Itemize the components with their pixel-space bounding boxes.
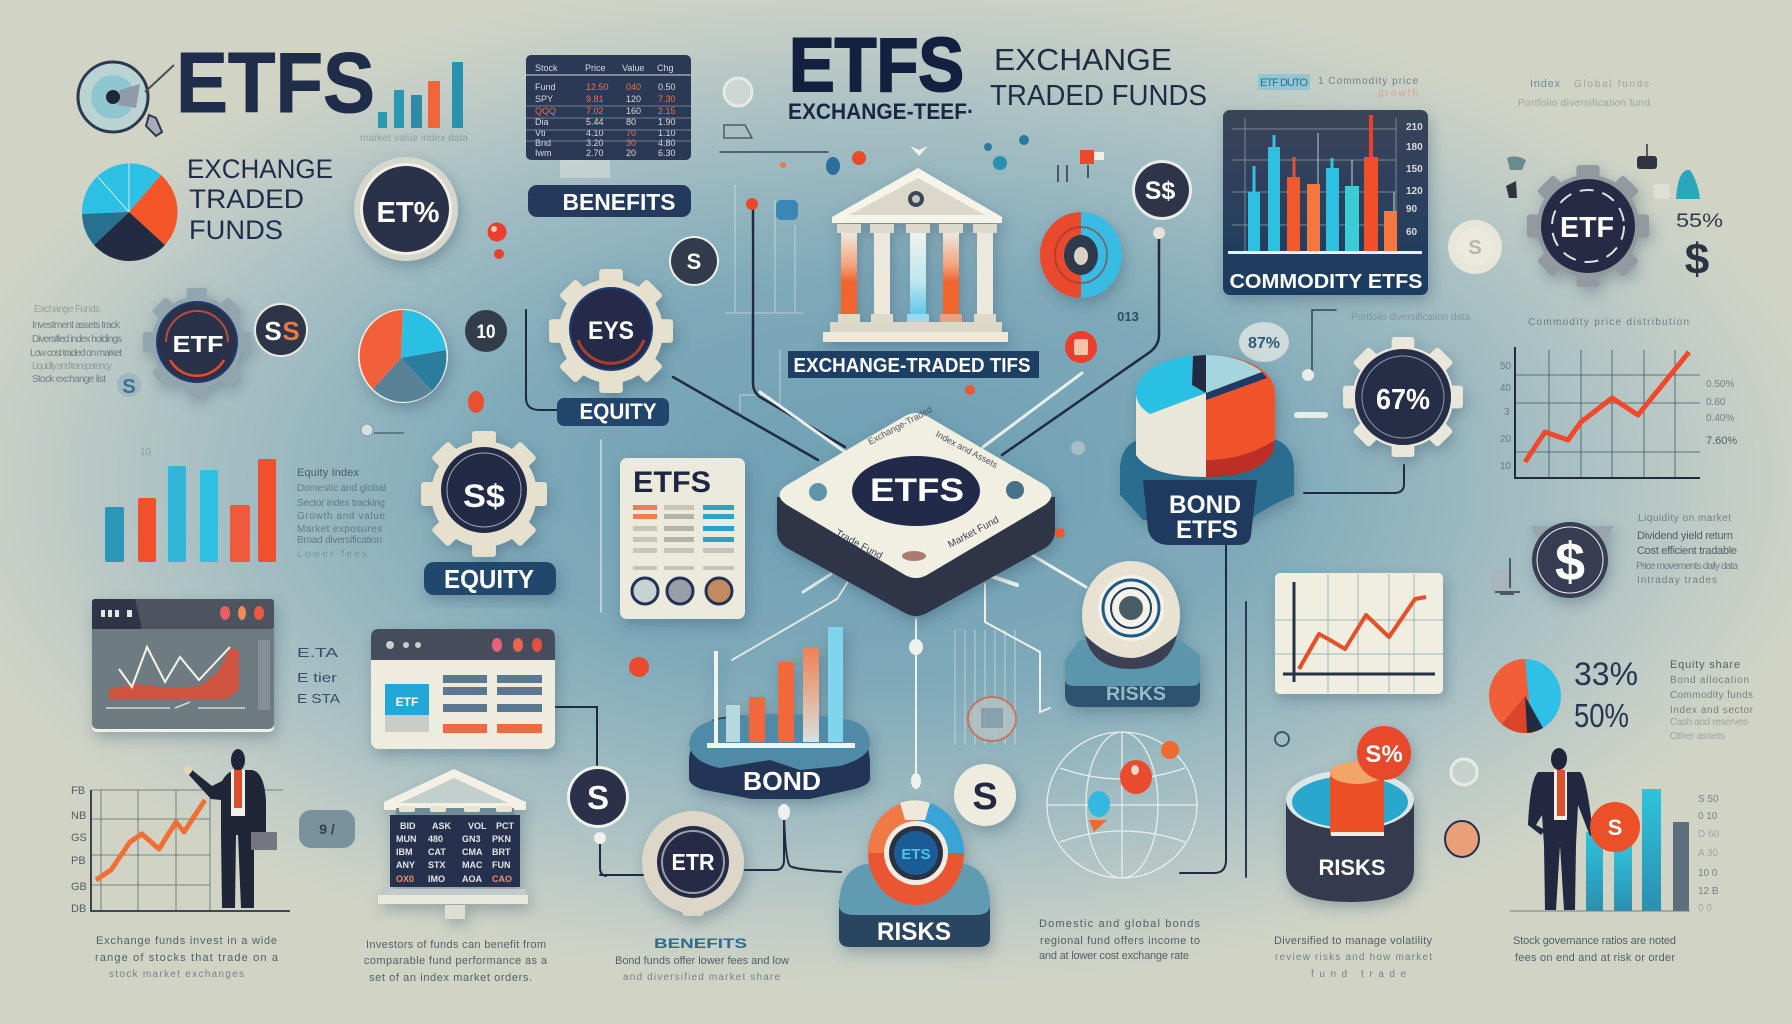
text block: benefits bottom: Bond funds offer lower fees and low [615,955,789,967]
text block: bar chart note: Sector index tracking [297,498,385,509]
heading: exchange traded funds left [187,154,333,245]
text block: pie note [1670,659,1754,742]
small dot and hex [965,309,1139,395]
icon: bank with data board: CMA [462,847,483,857]
platform: risks center: ETS [901,846,931,863]
badge: S$: S [264,316,282,346]
faint labels: top right: Global funds [1574,79,1649,90]
monitor: stock table: 4.10 [586,128,604,138]
monitor: stock table: 20 [626,148,636,158]
chart panel: commodity ETFs: 150 [1406,164,1423,175]
monitor: stock table: 2.70 [586,148,604,158]
text block: globe note: and at lower cost exchange rate [1039,950,1189,962]
labels: right bars: A 30 [1698,848,1718,859]
small icons: top center [724,78,1104,220]
badge: S top [1132,160,1192,239]
figure: businessman left [184,749,277,908]
figure: businessman right [1528,748,1596,910]
faint labels: top right [1258,74,1650,109]
monitor: stock table: Chg [657,63,674,73]
monitor: stock table: 5.44 [586,117,604,127]
monitor: stock table: Vti [535,128,546,138]
stats: percentages: 33% [1574,656,1638,692]
pie 3D: bond ETFs [1120,355,1294,520]
chart panel: commodity ETFs: COMMODITY ETFS [1230,271,1422,293]
badge: S top: S$ [1145,177,1175,205]
heading: exchange traded funds main: TRADED FUNDS [990,80,1207,112]
pins: red [488,222,506,259]
globe pins [1088,741,1179,832]
text block: left description [30,304,122,385]
line chart: top right: 0.60 [1706,397,1726,408]
icon: bank with data board: PKN [492,834,511,844]
text block: bottom 1: range of stocks that trade on a [95,952,279,964]
heading: exchange traded funds left: TRADED [189,184,304,214]
central hub: ETFS platform: Trade Fund [834,528,884,562]
monitor: stock table: 1.10 [658,128,676,138]
stat: 55%: 55% [1676,211,1723,232]
small icon: beside dollar [1491,558,1520,594]
text block: bar chart note: Market exposures [297,524,382,535]
window: dashboard: ETF [396,695,418,709]
monitor: stock table: 7.30 [658,94,676,104]
label: equity small [557,398,669,426]
pin: orange [468,391,484,413]
bar chart: top left [360,62,468,144]
heading: exchange traded funds main: EXCHANGE [994,42,1172,77]
gear: S$ equity: S$ [463,478,505,514]
ring icon: orange [968,697,1016,741]
ball: risks right: RISKS [1106,684,1166,705]
platform: bond [689,627,870,799]
label: bond ETFs: BOND [1169,491,1241,519]
text block: pie note: Index and sector [1670,705,1754,716]
gear: 67%: 67% [1376,384,1430,416]
platform: risks center [839,800,990,947]
text block: globe note [1039,918,1200,962]
icon: bank with data board: MAC [462,860,483,870]
monitor: stock table [526,55,691,178]
icon: bank with data board: CAO [492,874,512,884]
chart card: cream line chart [1275,573,1443,694]
monitor: stock table: 1.90 [658,117,676,127]
badge: ETF with ring left: ETF [172,331,224,357]
connector lines [526,152,1404,877]
ball: risks right [1065,561,1200,707]
chart: businessman left: DB [71,903,86,915]
text block: bottom 2: comparable fund performance as a [364,955,548,967]
label: equity small: EQUITY [580,399,657,424]
badge: small dark S [669,236,719,286]
badge: 10 [465,310,507,352]
text block: bar chart note: Equity Index [297,467,360,479]
bubble: 87%: 87% [1248,335,1280,352]
gear: EYS: EYS [588,317,634,345]
badge: S$: S [282,316,300,346]
monitor: stock table: 040 [626,82,641,92]
badge: ETF with ring left [143,288,251,396]
label: bond ETFs [1143,480,1257,545]
platform: bond: BOND [743,766,821,796]
text block: bar chart note [297,467,386,560]
ghost charts: faint background lines [726,185,1015,745]
text block: bottom right 1: review risks and how market [1275,952,1432,963]
monitor: stock table: 12.50 [586,82,609,92]
badge: S circle bottom [567,766,629,844]
text block: dollar note: Cost efficient tradable [1637,545,1737,557]
line chart: top right: 10 [1500,461,1512,472]
text block: bottom 2: set of an index market orders. [369,972,532,984]
coin: orange S: S [1608,815,1622,840]
icon: bank with data board: 480 [428,834,443,844]
faint labels: top right: 1 Commodity price [1318,76,1418,87]
text: window notes: E STA [297,691,340,706]
text block: bottom right 2: fees on end and at risk or order [1515,952,1675,964]
text block: pie note: Equity share [1670,659,1740,671]
icon: bank with data board: IMO [428,874,445,884]
chart: businessman left: PB [71,855,86,867]
icon: bank with data board: BRT [492,847,511,857]
heading: exchange traded funds left: FUNDS [189,215,283,245]
monitor: stock table: 120 [626,94,641,104]
dish: split red and cyan [1040,212,1122,298]
text block: left description: Liquidity and transparency [32,361,112,372]
subheading: exchange-teef: EXCHANGE-TEEF· [788,99,974,124]
text block: globe note: regional fund offers income to [1040,935,1200,947]
small items: bond right: Portfolio diversification data [1351,312,1470,323]
document: ETFS [620,458,745,619]
monitor: stock table: QQQ [535,106,556,116]
icon: dollar dark: $ [1685,235,1709,284]
bar chart: top left: market value index data [360,133,468,144]
chart: businessman left: NB [71,810,86,822]
heading: ETFS left: ETFS [176,36,375,131]
chart: businessman left [71,785,290,915]
monitor: stock table: 3.20 [586,138,604,148]
label: equity [424,562,556,595]
stats: percentages: 50% [1574,697,1629,734]
label: equity: EQUITY [444,564,534,594]
monitor: stock table: Fund [535,82,556,92]
text block: dollar note: Intraday trades [1637,575,1717,586]
monitor: stock table: Dia [535,117,549,127]
line chart: top right: 3 [1504,407,1510,418]
heading: exchange traded funds main [990,42,1207,112]
text block: bar chart note: Domestic and global [297,483,386,494]
icon: bank with data board: CAT [428,847,446,857]
faint labels: top right: Index [1530,78,1560,90]
text block: bar chart note: Broad diversification [297,535,382,546]
text block: pie note: Other assets [1670,731,1725,742]
text block: left description: Exchange Funds [34,304,100,315]
central hub: ETFS platform: Market Fund [946,515,1001,551]
central hub: ETFS platform: Exchange-Traded [866,405,934,447]
stats: percentages [1574,656,1638,734]
icon: bank with data board: ASK [432,821,452,831]
cylinder: risks [1286,726,1414,902]
coin: S cream: S [1468,237,1482,259]
chart panel: commodity ETFs: 90 [1406,204,1418,215]
text block: left description: Stock exchange list [32,374,106,385]
pin: red large [1120,760,1152,794]
text block: dollar note: Dividend yield return [1637,530,1733,542]
bubble: grey: 9 / [319,821,335,837]
labels: right bars: 12 B [1698,886,1719,897]
monitor: stock table: Bnd [535,138,551,148]
faint labels: top right: growth [1378,88,1418,99]
badge: ET% [354,157,458,261]
text block: benefits bottom: BENEFITS [654,935,747,951]
coin: dollar [1530,522,1614,598]
line chart: top right [1500,317,1737,478]
label: benefits [528,185,691,217]
label: benefits: BENEFITS [562,189,676,215]
monitor: stock table: 6.30 [658,148,676,158]
bubble: 87% [1239,322,1289,362]
icon: bank with data board: GN3 [462,834,481,844]
icon: bank with data board: PCT [496,821,515,831]
monitor: stock table: 30 [626,138,636,148]
text block: globe note: Domestic and global bonds [1039,918,1200,930]
icon: bank with data board: OX0 [396,874,414,884]
chart panel: commodity ETFs: 210 [1406,122,1423,133]
small icons: around gear [1506,144,1700,199]
text: window notes: E tier [297,670,338,685]
monitor: stock table: Price [585,63,606,73]
text block: bottom right 1 [1274,935,1432,980]
line chart: top right: 40 [1500,383,1512,394]
badge: ET%: ET% [376,197,440,229]
text block: bottom right 1: Diversified to manage volatility [1274,935,1432,947]
badge: small dark S: S [687,249,701,274]
badge: S circle bottom: S [587,779,609,816]
line chart: top right: 0.50% [1706,379,1734,390]
text block: pie note: Bond allocation [1670,675,1749,686]
text block: bottom right 2: Stock governance ratios are noted [1513,935,1676,947]
labels: right bars [1698,794,1720,914]
chart: businessman left: GS [71,832,87,844]
chart panel: commodity ETFs [1223,110,1428,295]
icon: bank with data board: IBM [396,847,412,857]
chart panel: commodity ETFs: 120 [1406,186,1423,197]
small dot: red [629,657,649,677]
line chart: top right: 0.40% [1706,413,1734,424]
gear: ETF top right: ETF [1560,212,1614,244]
text block: bottom 1: Exchange funds invest in a wide [96,935,277,947]
window: dark chart [92,599,274,732]
small items: bond right [1294,312,1470,418]
central hub: ETFS platform: ETFS [870,472,964,508]
labels: right bars: S 50 [1698,794,1719,805]
icon: bank with data board: ANY [396,860,415,870]
coin: dollar: $ [1555,532,1585,592]
monitor: stock table: SPY [535,94,553,104]
icon: swirl: S [122,376,136,398]
text block: bottom 1 [95,935,279,980]
badge: S$ [254,303,308,357]
bubble: grey [299,810,355,848]
text block: bottom 2 [364,939,548,984]
faint labels: top right: ETF DUTO [1260,77,1308,89]
chart panel: commodity ETFs: 180 [1406,142,1423,153]
text block: bar chart note: Growth and value [297,511,385,522]
platform: risks center: RISKS [877,918,951,946]
chart: businessman left: GB [71,881,87,893]
document: ETFS: ETFS [633,466,711,499]
heading: exchange traded funds left: EXCHANGE [187,154,333,184]
coin: S: S [972,776,998,818]
monitor: stock table: 160 [626,106,641,116]
icon: bank with data board: AOA [462,874,482,884]
monitor: stock table: Iwm [535,148,552,158]
line chart: top right: 50 [1500,361,1512,372]
gear: ETF top right [1527,165,1649,287]
labels: right bars: 0 0 [1698,903,1712,914]
cylinder: risks: RISKS [1318,855,1386,880]
monitor: stock table: 70 [626,128,636,138]
monitor: stock table: Stock [535,63,558,73]
gear: ETR [642,811,744,916]
text block: bottom 1: stock market exchanges [109,969,244,980]
cylinder: risks: S% [1365,741,1403,768]
faint labels: top right: Portfolio diversification fund [1518,98,1650,109]
text block: dollar note: Price movements daily data [1636,561,1738,572]
badge: 10: 10 [476,322,496,343]
text block: benefits bottom: and diversified market share [623,972,780,983]
text block: left description: Low cost traded on market [30,348,122,359]
text block: left description: Investment assets track [32,320,121,331]
line chart: top right: 20 [1500,434,1512,445]
icon: bank with data board: STX [428,860,446,870]
labels: right bars: 10 0 [1698,868,1718,879]
node dots: bond and center [778,639,923,820]
label: bond ETFs: ETFS [1176,516,1238,544]
central hub: ETFS platform: Index and Assets [934,429,1000,470]
gear: EYS [549,269,673,393]
icon: target with needle [78,62,174,136]
icon: swirl [117,373,141,398]
text block: pie note: Commodity funds [1670,690,1753,701]
bars with figure: bottom right [1510,789,1690,911]
icon: bank with data board: FUN [492,860,510,870]
text block: benefits bottom [615,935,789,983]
labels: right bars: 0 10 [1698,811,1718,822]
line chart: top right: Commodity price distribution [1528,317,1689,328]
chart panel: commodity ETFs: 60 [1406,227,1418,238]
monitor: stock table: 9.81 [586,94,604,104]
icon: bank with data board [378,769,528,919]
text block: bar chart note: Lower fees [297,549,367,560]
gear: ETR: ETR [672,849,715,875]
window: dashboard [371,629,555,749]
text block: bottom right 2 [1513,935,1676,964]
gear: S$ equity [421,431,547,557]
icon: small link [361,424,404,436]
globe [1047,732,1197,878]
pie chart: top left [82,163,178,261]
icon: bank main [823,168,1008,342]
central hub: ETFS platform [777,405,1055,616]
heading: main ETFS: ETFS [789,23,964,108]
monitor: stock table: Value [622,63,644,73]
text block: pie note: Cash and reserves [1670,717,1748,728]
small marks: center [1055,441,1085,538]
monitor: stock table: 80 [626,117,636,127]
small ring icons: right [1275,732,1479,857]
bar chart: mid left: 10 [140,447,152,458]
text block: bottom 2: Investors of funds can benefit from [366,939,546,951]
labels: right bars: D 60 [1698,829,1720,840]
gear: 67% [1343,337,1463,457]
text block: bottom right 1: fund trade [1311,969,1406,980]
coin: orange S [1590,802,1640,852]
chart: businessman left: FB [71,785,85,797]
text block: dollar note [1636,513,1738,586]
monitor: stock table: 4.80 [658,138,676,148]
text: window notes: E.TA [297,645,338,660]
bar chart: mid left [105,447,276,562]
small dot and hex: 013 [1117,309,1139,324]
monitor: stock table: 7.02 [586,106,604,116]
text block: dollar note: Liquidity on market [1638,513,1731,524]
coin: S [954,764,1016,826]
label: exchange-traded: EXCHANGE-TRADED TIFS [794,355,1030,377]
pie chart: bottom right [1489,659,1561,733]
icon: bank with data board: BID [400,821,416,831]
icon: bank with data board: VOL [468,821,487,831]
text: window notes [297,645,340,706]
pie chart: middle left [358,309,448,403]
coin: S cream [1448,220,1502,274]
monitor: stock table: 0.50 [658,82,676,92]
icon: bank with data board: MUN [396,834,416,844]
text block: left description: Diversified index holdings [32,334,122,345]
monitor: stock table: 2.15 [658,106,676,116]
line chart: top right: 7.60% [1706,435,1737,447]
